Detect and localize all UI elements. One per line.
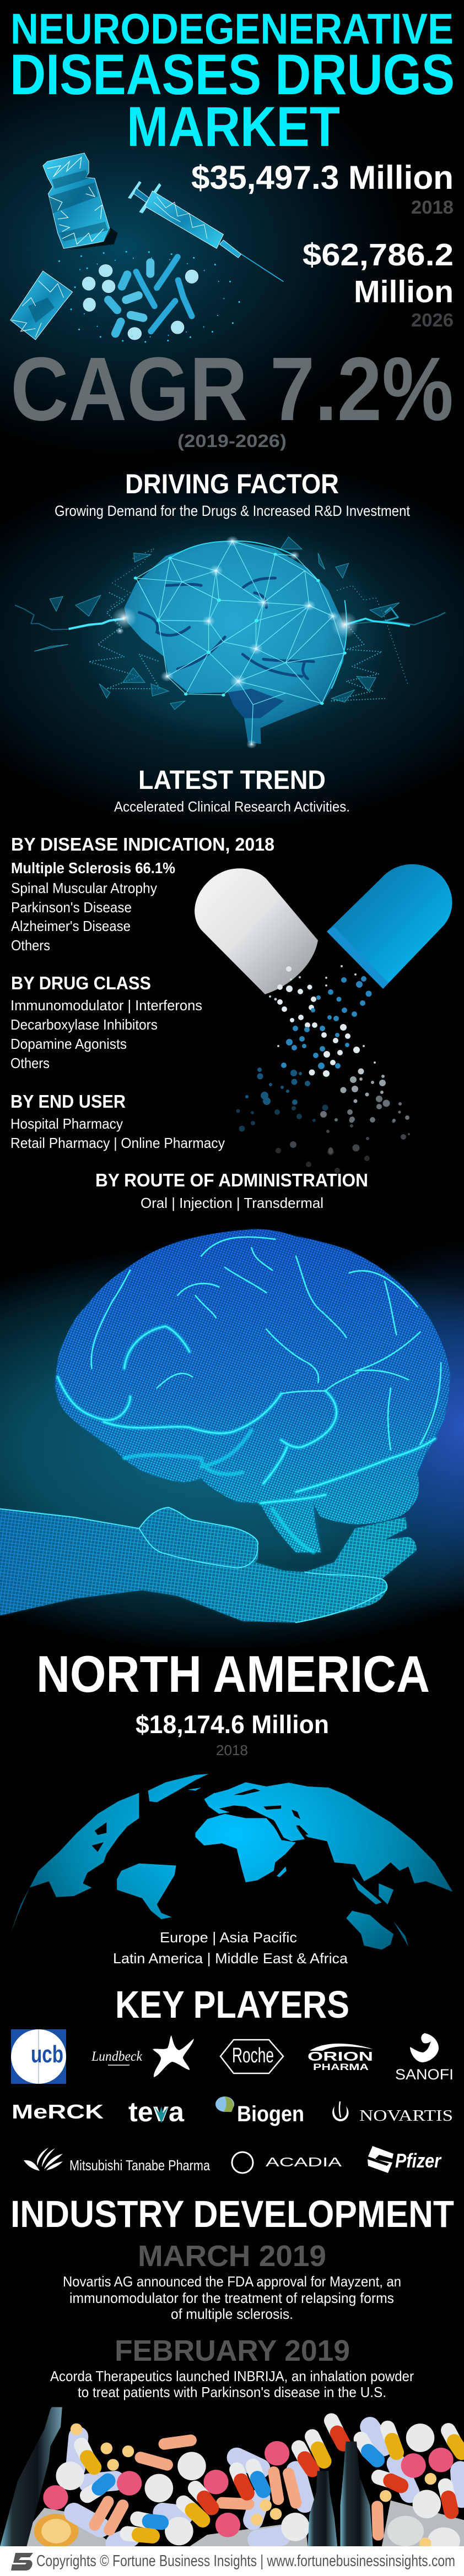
- particles: [59, 252, 239, 342]
- stat: north america market size: 2018: [216, 1742, 248, 1758]
- stat: 2018 market size: [191, 159, 454, 218]
- illustration: open capsule: [195, 864, 452, 1173]
- yellow pills: [71, 2423, 436, 2549]
- logo: Pfizer: Pfizer: [395, 2149, 442, 2172]
- great lakes cut-out: [91, 1822, 106, 1852]
- panel: by end user: [10, 1091, 225, 1151]
- stat: north america market size: [136, 1710, 329, 1758]
- icon: medicine bottle: [43, 153, 118, 250]
- heading: key players: KEY PLAYERS: [115, 1983, 349, 2026]
- capsule blue half: [327, 864, 452, 989]
- header background glow: [0, 0, 464, 462]
- icon: small bottle lying down: [10, 271, 73, 340]
- powder particles: [236, 965, 410, 1173]
- logo: Pfizer: [368, 2146, 442, 2173]
- text: other regions: Latin America | Middle East & Africa: [113, 1950, 348, 1967]
- illustration: pills and ampoules: [0, 2407, 464, 2555]
- lightning right: [345, 612, 445, 625]
- panel: by disease indication: Spinal Muscular Atrophy: [11, 880, 157, 896]
- continent: Greenland: [148, 1774, 209, 1802]
- logo: Acadia: [232, 2152, 342, 2173]
- panel: February 2019 development: [50, 2334, 414, 2400]
- panel: by drug class: Decarboxylase Inhibitors: [10, 1016, 158, 1033]
- lightning left: [15, 605, 445, 630]
- brain dot texture: [55, 1229, 450, 1553]
- stat: 2018 market size: 2018: [411, 197, 454, 218]
- stat: 2026 market size: 2026: [411, 310, 454, 331]
- logo: Orion Pharma: PHARMA: [313, 2062, 369, 2072]
- capsule collar: [327, 927, 389, 989]
- peach capsules: [95, 2440, 378, 2535]
- two-tone capsules: [82, 2421, 462, 2536]
- panel: by end user: Retail Pharmacy | Online Pharmacy: [10, 1135, 225, 1151]
- illustration: vials, syringe and pills: [10, 153, 283, 342]
- brain mesh: [136, 541, 345, 744]
- text: routes: Oral | Injection | Transdermal: [141, 1195, 323, 1211]
- text: driving factor description: Growing Demand for the Drugs & Increased R&D Investment: [55, 503, 410, 519]
- brain body: [125, 541, 346, 744]
- logo: Merck: MeRCK: [12, 2100, 104, 2123]
- illustration: dotted brain and wireframe hand: [0, 1229, 450, 1622]
- continent: Africa: [195, 1814, 296, 1882]
- panel: by drug class: Dopamine Agonists: [10, 1036, 127, 1052]
- glowing nodes: [112, 536, 358, 749]
- text: other regions: [113, 1929, 348, 1967]
- logo: Biogen: [215, 2096, 304, 2126]
- panel: March 2019 development: of multiple sclerosis.: [171, 2306, 293, 2322]
- logo: Novartis: NOVARTIS: [359, 2107, 453, 2125]
- stat: 2026 market size: [303, 237, 454, 331]
- continent: North America: [10, 1793, 139, 1934]
- stat: 2018 market size: $35,497.3 Million: [191, 159, 454, 196]
- title: MARKET: [127, 95, 340, 158]
- logo: Novartis: [332, 2101, 453, 2125]
- brain folds: [58, 1237, 441, 1503]
- icon: syringe: [128, 181, 283, 282]
- logo: Lundbeck: Lundbeck: [91, 2049, 143, 2064]
- driving factor background glow: [0, 457, 464, 831]
- red tablets: [43, 2441, 454, 2537]
- hand contours: [0, 1507, 387, 1622]
- capsule white half: [195, 868, 318, 994]
- stat: 2026 market size: $62,786.2: [303, 237, 454, 273]
- illustration: low-poly brain: [15, 534, 445, 749]
- panel: by drug class: BY DRUG CLASS: [11, 973, 151, 993]
- panel: by disease indication: BY DISEASE INDICATION, 2018: [11, 834, 274, 854]
- ampoule right: [341, 2442, 373, 2547]
- panel: February 2019 development: Acorda Therapeutics launched INBRIJA, an inhalation powder: [50, 2368, 414, 2384]
- ampoule centre: [307, 2471, 337, 2547]
- ampoule left: [0, 2407, 62, 2547]
- stat: 2026 market size: Million: [354, 274, 454, 309]
- islands: [188, 1788, 408, 1947]
- logo: Acadia: ACADIA: [266, 2155, 342, 2169]
- panel: February 2019 development: FEBRUARY 2019: [115, 2334, 350, 2367]
- heading: north america: NORTH AMERICA: [36, 1645, 430, 1703]
- continent: Australia: [346, 1911, 393, 1950]
- blister packs: [13, 2501, 464, 2555]
- hand mesh texture: [0, 1507, 417, 1622]
- heading: by route of administration: BY ROUTE OF ADMINISTRATION: [95, 1170, 368, 1190]
- panel: by drug class: Immunomodulator | Interferons: [10, 997, 202, 1014]
- logo: ucb: [11, 2029, 66, 2084]
- logo: Sanofi: [395, 2033, 454, 2083]
- logo: Biogen: Biogen: [237, 2102, 304, 2126]
- panel: by disease indication: Parkinson's Disease: [11, 899, 132, 916]
- logo: Orion Pharma: [307, 2044, 373, 2072]
- brain glow: [55, 1229, 450, 1553]
- logo: Lundbeck: [91, 2035, 194, 2077]
- heading: latest trend: LATEST TREND: [138, 766, 326, 795]
- panel: by disease indication: Multiple Sclerosis 66.1%: [11, 859, 175, 876]
- panel: company logos: [11, 2029, 454, 2174]
- continent: South America: [117, 1864, 176, 1919]
- white tablets: [56, 2423, 441, 2545]
- text: other regions: Europe | Asia Pacific: [160, 1929, 297, 1946]
- panel: by end user: Hospital Pharmacy: [10, 1115, 123, 1132]
- hand wireframe: [0, 1507, 417, 1622]
- logo: Roche: Roche: [232, 2044, 274, 2067]
- logo: Sanofi: SANOFI: [395, 2066, 454, 2083]
- floating triangles: [34, 537, 400, 710]
- panel: March 2019 development: MARCH 2019: [138, 2240, 326, 2273]
- stat: CAGR: (2019-2026): [177, 431, 287, 451]
- panel: by disease indication: Others: [11, 937, 50, 954]
- footer bar: [0, 2546, 464, 2576]
- brain veins: [139, 578, 314, 679]
- panel: March 2019 development: Novartis AG announced the FDA approval for Mayzent, an: [63, 2273, 401, 2290]
- panel: February 2019 development: to treat patients with Parkinson's disease in the U.S.: [78, 2384, 386, 2400]
- big brain background right glow: [220, 1214, 464, 1652]
- particles around brain: [89, 548, 408, 701]
- panel: by disease indication: Alzheimer's Disease: [11, 918, 131, 934]
- logo: Mitsubishi Tanabe Pharma: Mitsubishi Tanabe Pharma: [69, 2157, 210, 2174]
- panel: March 2019 development: [63, 2240, 401, 2322]
- illustration: globe: [10, 1774, 453, 1950]
- panel: March 2019 development: immunomodulator for the treatment of relapsing forms: [69, 2290, 394, 2306]
- icon: round tablets: [82, 264, 198, 340]
- logo: Orion Pharma: ORION: [307, 2049, 373, 2063]
- seas cut-outs: [219, 1789, 309, 1840]
- continent: Eurasia: [204, 1782, 453, 1892]
- logo: Teva: teva: [128, 2096, 185, 2127]
- panel: by drug class: [10, 973, 202, 1071]
- logo: ucb: ucb: [31, 2041, 63, 2068]
- panel: by end user: BY END USER: [10, 1091, 126, 1112]
- big brain background: [0, 1214, 464, 1652]
- heading: driving factor: DRIVING FACTOR: [125, 469, 339, 499]
- logo: Mitsubishi Tanabe Pharma: [24, 2148, 210, 2174]
- text: latest trend description: Accelerated Clinical Research Activities.: [114, 798, 350, 815]
- icon: capsules: [109, 263, 150, 334]
- hand glow: [0, 1507, 416, 1622]
- icon: ampoules: [136, 257, 192, 331]
- panel: by disease indication: [11, 834, 274, 954]
- lavender tablets: [74, 2427, 462, 2544]
- logo: Roche: [220, 2040, 283, 2073]
- brain folds glow: [58, 1326, 435, 1553]
- stat: north america market size: $18,174.6 Million: [136, 1710, 329, 1739]
- brain dotted body: [55, 1229, 450, 1553]
- brain halo: [91, 534, 376, 731]
- panel: by drug class: Others: [10, 1055, 50, 1071]
- icon: Fortune Business Insights logo: [11, 2553, 33, 2570]
- title: [10, 4, 455, 158]
